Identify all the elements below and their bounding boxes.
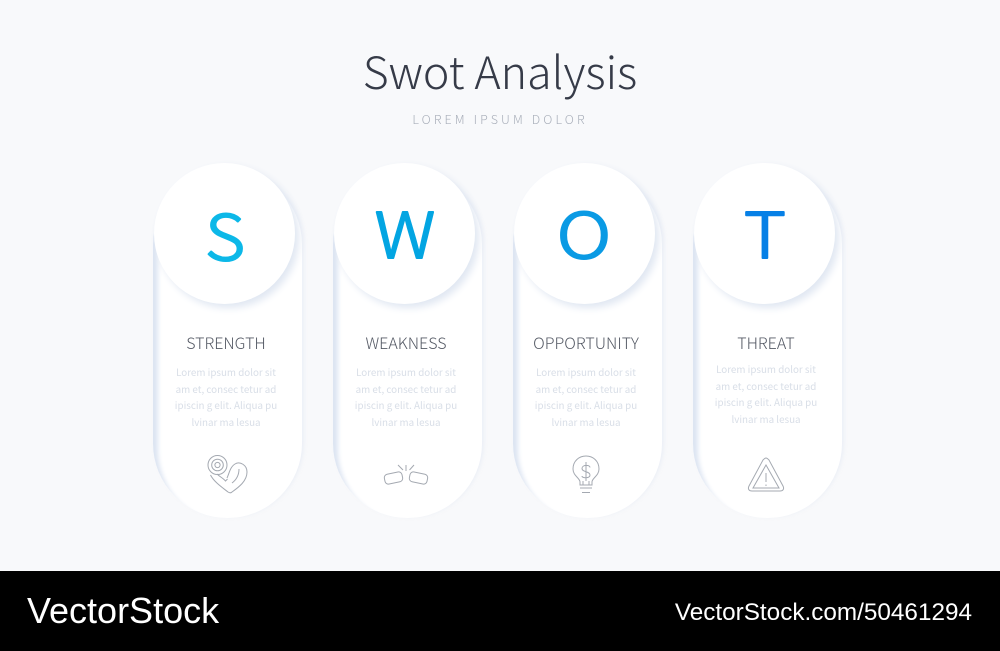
text block: strength: Lorem ipsum dolor sit [176,365,276,379]
panel: opportunity [513,174,664,493]
letter circle [694,163,835,304]
text block: opportunity: lvinar ma lesua [551,414,621,428]
pill background [693,170,842,518]
subtitle: LOREM IPSUM DOLOR [412,109,588,128]
icon: dollar bulb [572,456,600,493]
title: Swot Analysis [363,37,637,102]
text block: weakness: Lorem ipsum dolor sit [356,365,456,379]
reference url: VectorStock.com/50461294 [675,599,972,626]
letter O: O [557,185,611,276]
letter T: T [744,186,786,277]
text block: opportunity: Lorem ipsum dolor sit [536,365,636,379]
heading: weakness: WEAKNESS [365,330,447,354]
letter W: W [375,185,435,277]
brand wordmark: VectorStock [27,590,219,631]
footer bar [0,571,1000,651]
text block: strength: ipiscin g elit. Aliqua pu [175,398,277,412]
icon: broken chain [384,464,428,485]
text block: opportunity: am et, consec tetur ad [536,382,636,396]
pill background [513,170,662,518]
heading: opportunity: OPPORTUNITY [533,330,639,354]
text block: strength: am et, consec tetur ad [176,382,276,396]
text block: strength [175,365,277,428]
text block: weakness [355,365,457,428]
heading: strength: STRENGTH [186,330,266,354]
icon: muscle heart [208,455,248,494]
letter circle [334,163,475,304]
pill background [333,170,482,518]
text block: weakness: ipiscin g elit. Aliqua pu [355,398,457,412]
text block: opportunity: ipiscin g elit. Aliqua pu [535,398,637,412]
panel: strength [153,174,304,494]
text block: threat: lvinar ma lesua [731,412,801,426]
letter circle [154,163,295,304]
text block: strength: lvinar ma lesua [191,414,261,428]
letter S: S [205,187,245,278]
icon: warning triangle [748,458,784,492]
text block: threat: Lorem ipsum dolor sit [716,362,816,376]
text block: threat [715,362,817,426]
text block: weakness: lvinar ma lesua [371,414,441,428]
text block: weakness: am et, consec tetur ad [356,382,456,396]
letter circle [514,163,655,304]
panel: threat [693,174,844,492]
text block: threat: ipiscin g elit. Aliqua pu [715,395,817,409]
heading: threat: THREAT [737,330,795,354]
text block: threat: am et, consec tetur ad [716,378,816,392]
panel: weakness [333,174,484,492]
text block: opportunity [535,365,637,428]
pill background [153,170,302,518]
